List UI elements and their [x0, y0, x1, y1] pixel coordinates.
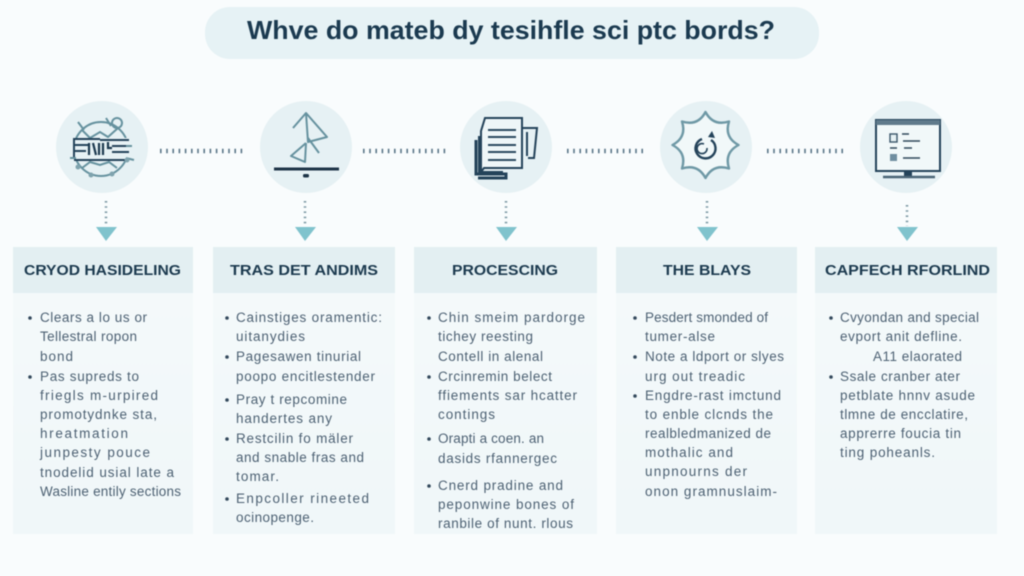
bullet list: step 3: Chin smeim pardorge: [438, 310, 585, 325]
panel: step 4: [616, 247, 797, 534]
bullet list: step 4: [633, 310, 784, 499]
connector: step 1 to 2: [160, 149, 245, 153]
bullet list: step 1: junpesty pouce: [39, 445, 150, 460]
arrow: step 5 down: [897, 205, 918, 241]
bullet list: step 2: Cainstiges oramentic:: [236, 310, 382, 325]
bullet list: step 5: evport anit defline.: [840, 329, 962, 344]
bullet list: step 5: petblate hnnv asude: [840, 388, 975, 403]
bullet list: step 5: Cvyondan and special: [840, 310, 979, 325]
bullet list: step 4: urg out treadic: [645, 369, 745, 384]
icon: monitor: [860, 101, 952, 193]
bullet list: step 3: contings: [438, 407, 495, 422]
bullet list: step 2: Pray t repcomine: [236, 392, 347, 407]
bullet list: step 1: Tellestral ropon: [40, 329, 137, 344]
bullet list: step 5: Ssale cranber ater: [840, 369, 960, 384]
icon: drafting tool: [260, 101, 352, 193]
connector: step 4 to 5: [767, 149, 843, 153]
bullet list: step 3: Orapti a coen. an: [438, 431, 544, 446]
arrow: step 2 down: [295, 201, 316, 241]
heading: step 1: CRYOD HASIDELING: [24, 263, 181, 279]
bullet list: step 3: Contell in alenal: [438, 349, 543, 364]
bullet list: step 5: apprerre foucia tin: [840, 426, 961, 441]
panel: step 3: [414, 247, 597, 534]
icon: sunburst refresh: [660, 101, 752, 193]
bullet list: step 2: and snable fras and: [236, 450, 364, 465]
bullet list: step 4: realbledmanized de: [645, 426, 771, 441]
bullet list: step 2: Restcilin fo mäler: [236, 431, 354, 446]
bullet list: step 5: [829, 310, 979, 460]
bullet list: step 1: friegls m-urpired: [40, 388, 158, 403]
arrow: step 1 down: [96, 201, 117, 241]
bullet list: step 4: unpnourns der: [645, 464, 748, 479]
title banner: Whve do mateb dy tesihfle sci ptc bords?: [247, 15, 775, 45]
bullet list: step 1: bond: [40, 349, 73, 364]
connector: step 3 to 4: [567, 149, 645, 153]
bullet list: step 1: Wasline entily sections: [40, 484, 181, 499]
bullet list: step 4: onon gramnuslaim-: [645, 484, 777, 499]
bullet list: step 2: ocinopenge.: [236, 510, 314, 525]
bullet list: step 1: [28, 310, 181, 499]
title banner: [205, 7, 819, 59]
bullet list: step 1: Pas supreds to: [40, 369, 139, 384]
bullet list: step 5: A11 elaorated: [873, 349, 962, 364]
bullet list: step 5: tlmne de encclatire,: [840, 407, 968, 422]
heading: step 5: CAPFECH RFORLIND: [825, 263, 990, 279]
bullet list: step 2: handertes any: [236, 411, 332, 426]
bullet list: step 4: tumer-alse: [645, 329, 715, 344]
icon: globe with banner: [56, 101, 148, 193]
bullet list: step 3: tichey reesting: [438, 329, 533, 344]
bullet list: step 1: hreatmation: [40, 426, 128, 441]
bullet list: step 3: [427, 310, 585, 531]
bullet list: step 2: Pagesawen tinurial: [236, 349, 361, 364]
bullet list: step 3: ffiements sar hcatter: [438, 388, 578, 403]
bullet list: step 4: Pesdert smonded of: [645, 310, 768, 325]
panel: step 5: [815, 247, 997, 534]
icon: documents: [460, 101, 552, 193]
panel: step 1: [13, 247, 193, 534]
bullet list: step 4: Note a ldport or slyes: [645, 349, 784, 364]
heading: step 2: TRAS DET ANDIMS: [230, 263, 378, 279]
arrow: step 4 down: [697, 201, 718, 241]
arrow: step 3 down: [496, 201, 517, 241]
bullet list: step 2: poopo encitlestender: [236, 369, 376, 384]
bullet list: step 5: ting poheanls.: [840, 445, 935, 460]
bullet list: step 2: Enpcoller rineeted: [236, 491, 369, 506]
heading: step 4: THE BLAYS: [663, 263, 751, 279]
bullet list: step 4: to enble clcnds the: [645, 407, 773, 422]
bullet list: step 2: [225, 310, 382, 525]
bullet list: step 1: promotydnke sta,: [40, 407, 157, 422]
bullet list: step 2: uitanydies: [236, 329, 305, 344]
bullet list: step 4: mothalic and: [645, 445, 733, 460]
bullet list: step 1: Clears a lo us or: [40, 310, 148, 325]
bullet list: step 3: peponwine bones of: [438, 497, 574, 512]
bullet list: step 3: dasids rfannergec: [438, 451, 557, 466]
bullet list: step 3: Crcinremin belect: [438, 369, 552, 384]
bullet list: step 2: tomar.: [236, 469, 279, 484]
bullet list: step 3: Cnerd pradine and: [438, 478, 563, 493]
bullet list: step 1: tnodelid usial late a: [40, 465, 174, 480]
heading: step 3: PROCESCING: [452, 263, 558, 279]
panel: step 2: [213, 247, 395, 534]
connector: step 2 to 3: [363, 149, 447, 153]
bullet list: step 4: Engdre-rast imctund: [645, 388, 781, 403]
bullet list: step 3: ranbile of nunt. rlous: [438, 516, 573, 531]
